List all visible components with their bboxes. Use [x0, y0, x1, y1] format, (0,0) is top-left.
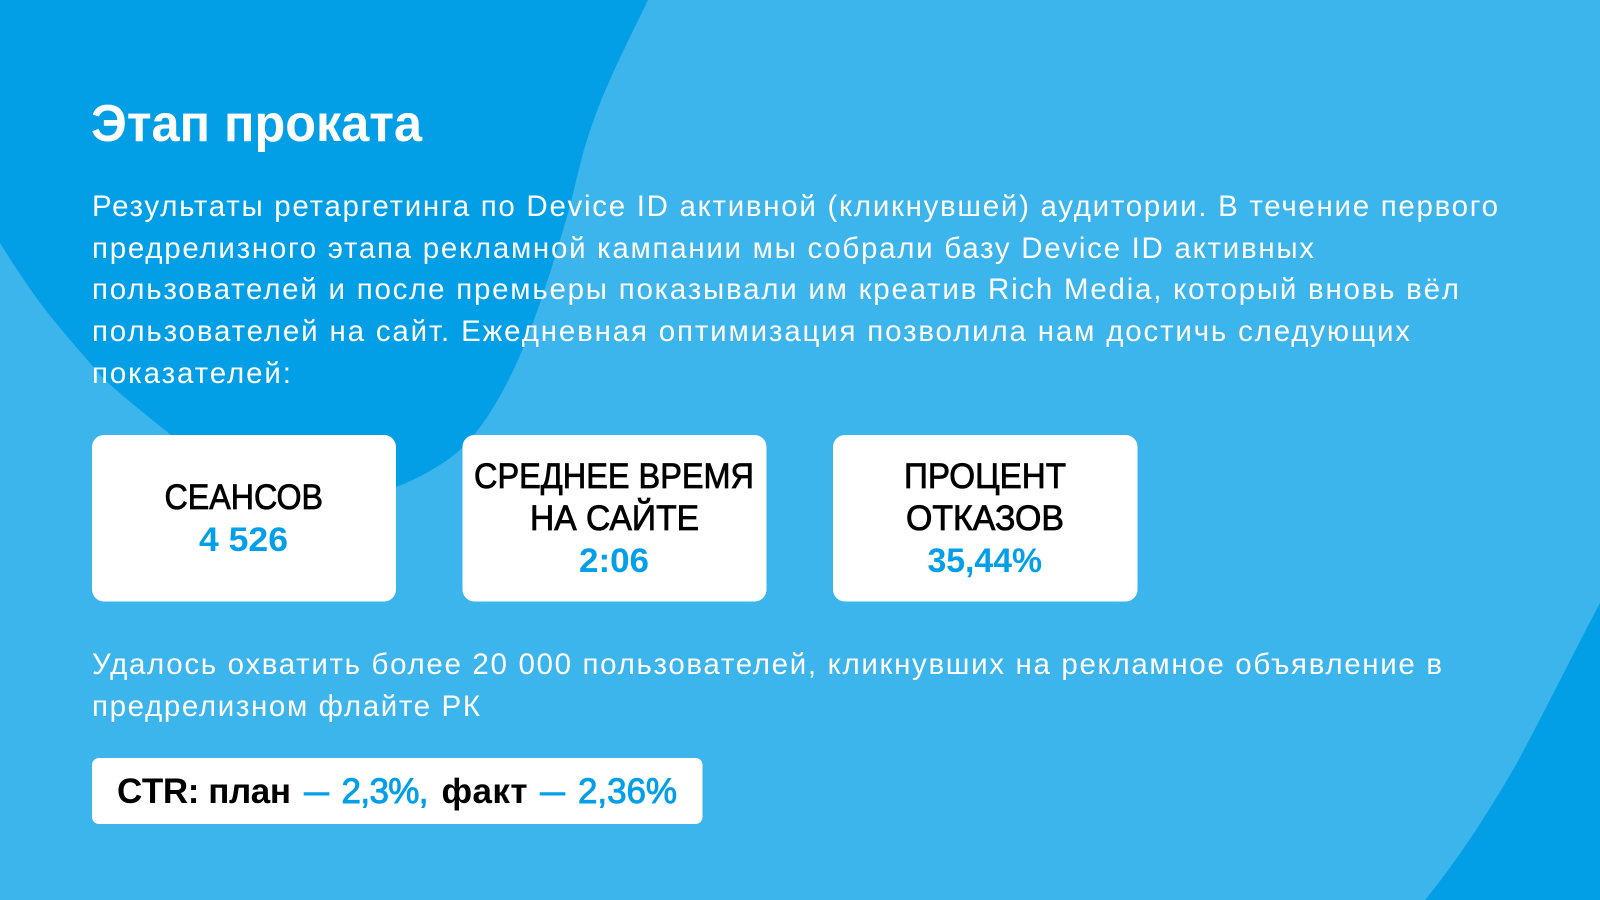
callout: CTR: — [304, 772, 329, 811]
decorative blob: top left [0, 0, 648, 495]
value: bounce rate: 35,44% [928, 542, 1042, 580]
panel: bounce rate [833, 435, 1138, 602]
callout: CTR: — [540, 772, 565, 811]
panel: average time on site [462, 435, 766, 602]
label: bounce rate: ОТКАЗОВ [906, 499, 1064, 538]
text block: intro: предрелизного этапа рекламной кампании мы собрали базу Device ID активных [92, 232, 1314, 265]
label: sessions: СЕАНСОВ [164, 478, 323, 517]
label: bounce rate [904, 457, 1066, 538]
value: average time on site: 2:06 [579, 542, 649, 580]
text block: intro: пользователей на сайт. Ежедневная оптимизация позволила нам достичь следующих [92, 315, 1410, 348]
text block: intro [92, 190, 1498, 390]
text block: reach [92, 648, 1442, 723]
text block: intro: показателей: [92, 357, 291, 390]
callout: CTR: факт [442, 772, 528, 811]
title: Этап проката [91, 95, 423, 153]
label: average time on site [474, 457, 754, 538]
text block: intro: пользователей и после премьеры показывали им креатив Rich Media, который вновь вёл [92, 273, 1459, 306]
callout: CTR [92, 758, 702, 824]
callout: CTR: 2,36% [578, 772, 677, 811]
label: average time on site: СРЕДНЕЕ ВРЕМЯ [474, 457, 754, 496]
callout: CTR: CTR: план [117, 772, 291, 811]
text block: reach: Удалось охватить более 20 000 пользователей, кликнувших на рекламное объявление в [92, 648, 1442, 681]
label: average time on site: НА САЙТЕ [530, 498, 699, 538]
text block: intro: Результаты ретаргетинга по Device ID активной (кликнувшей) аудитории. В течение первого [92, 190, 1498, 223]
callout: CTR: 2,3%, [342, 772, 428, 811]
decorative blob: bottom right [1425, 603, 1600, 900]
label: bounce rate: ПРОЦЕНТ [904, 457, 1066, 496]
text block: reach: предрелизном флайте РК [92, 690, 481, 723]
panel: sessions [92, 435, 396, 602]
value: sessions: 4 526 [199, 521, 288, 559]
